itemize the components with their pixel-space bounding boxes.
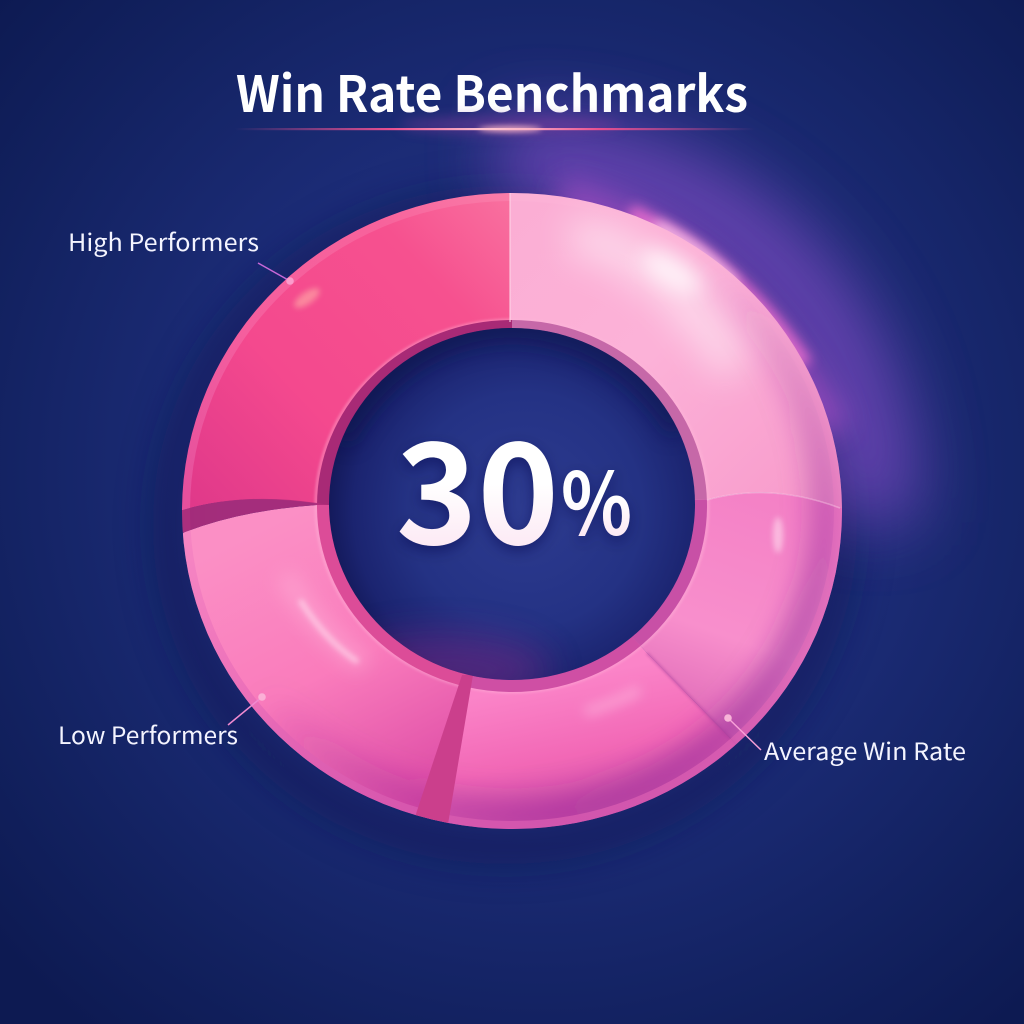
segment: right (632, 492, 842, 744)
hole lower-left purple glow (330, 330, 680, 706)
highlight: top right (570, 235, 735, 370)
divider: top centre seam (509, 190, 511, 322)
outer rim bevel (186, 197, 838, 825)
highlight: right (773, 517, 783, 553)
centre value: 30 (396, 383, 559, 585)
lower tube shading (302, 292, 842, 821)
segment: high performers (182, 193, 510, 510)
highlight: top right core (640, 244, 708, 298)
highlight: upper left (292, 286, 322, 310)
centre hole (329, 328, 695, 706)
label: low performers (58, 693, 266, 753)
segment: upper right (510, 193, 842, 508)
label: average win rate (724, 714, 966, 769)
glow behind ring top right (500, 164, 871, 520)
donut chart (182, 193, 842, 829)
inner rim: low (317, 505, 468, 685)
label: high performers (68, 223, 294, 285)
shadow behind ring (170, 203, 840, 847)
inner rim: high (317, 320, 512, 505)
inner rim: top (512, 320, 707, 500)
divider: high/low dark band (182, 498, 327, 533)
inner rim: right (632, 500, 707, 646)
title underline (235, 116, 755, 134)
centre value: % (561, 435, 632, 560)
inner rim: bottom (468, 637, 640, 692)
segment: low performers (182, 505, 459, 820)
right seam (707, 493, 840, 508)
inner bevel highlight (316, 320, 708, 692)
divider: low/bottom dark band (414, 675, 473, 830)
segment: bottom (434, 638, 736, 829)
label: low performers: Low Performers (58, 716, 238, 751)
label: average win rate: Average Win Rate (764, 732, 966, 767)
crease: bottom/right (646, 652, 728, 736)
label: high performers: High Performers (68, 223, 259, 258)
highlight: bottom (585, 690, 640, 712)
highlight: lower left (285, 575, 365, 665)
title: Win Rate Benchmarks (236, 55, 748, 127)
